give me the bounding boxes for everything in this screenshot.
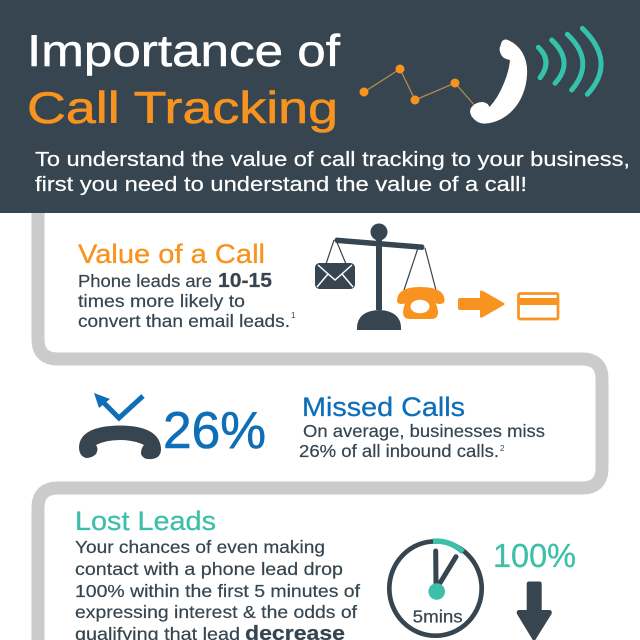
body text	[299, 421, 545, 461]
body text: 100% within the first 5 minutes of	[75, 581, 360, 601]
heading: Lost Leads	[75, 506, 216, 536]
statistic: 100%	[493, 537, 576, 574]
title line 1: Importance of	[27, 27, 341, 76]
icon: stopwatch	[389, 541, 482, 636]
clock label: 5mins	[413, 606, 463, 626]
body text: expressing interest & the odds of	[75, 602, 357, 622]
body text: Your chances of even making	[75, 537, 325, 557]
body text: 26% of all inbound calls.	[299, 441, 499, 461]
panel: missed calls	[79, 392, 545, 461]
body text: 2	[500, 444, 505, 453]
body text: On average, businesses miss	[303, 421, 545, 441]
subtitle	[35, 148, 630, 196]
heading: Missed Calls	[302, 392, 465, 422]
icon: rotary phone	[397, 287, 445, 319]
body text: 1	[291, 311, 296, 320]
winding path connector	[38, 210, 602, 640]
subtitle: first you need to understand the value of a call!	[35, 173, 527, 196]
heading: Value of a Call	[78, 239, 265, 269]
icon: missed call arrow	[94, 393, 143, 418]
icon: credit card	[518, 294, 558, 319]
line graph trail	[360, 64, 476, 107]
icon: down arrow	[517, 582, 552, 640]
icon: telephone handset	[470, 40, 527, 124]
icon: signal waves	[538, 28, 601, 94]
arrow	[458, 290, 504, 318]
body text	[75, 537, 360, 640]
panel: lost leads	[75, 506, 576, 640]
icon: envelope	[315, 263, 355, 289]
icon: balance scale	[315, 224, 445, 330]
body text: convert than email leads.	[78, 311, 290, 331]
panel: header	[0, 0, 640, 213]
panel: value of a call	[78, 224, 558, 331]
icon: hung up handset	[79, 426, 161, 459]
body text: 10-15	[218, 270, 272, 292]
body text: times more likely to	[78, 291, 245, 311]
body text: Phone leads are	[78, 271, 212, 291]
body text	[78, 270, 296, 331]
body text: contact with a phone lead drop	[75, 559, 343, 579]
title line 2: Call Tracking	[27, 84, 338, 133]
statistic: 26%	[163, 402, 266, 460]
subtitle: To understand the value of call tracking to your business,	[35, 148, 630, 171]
